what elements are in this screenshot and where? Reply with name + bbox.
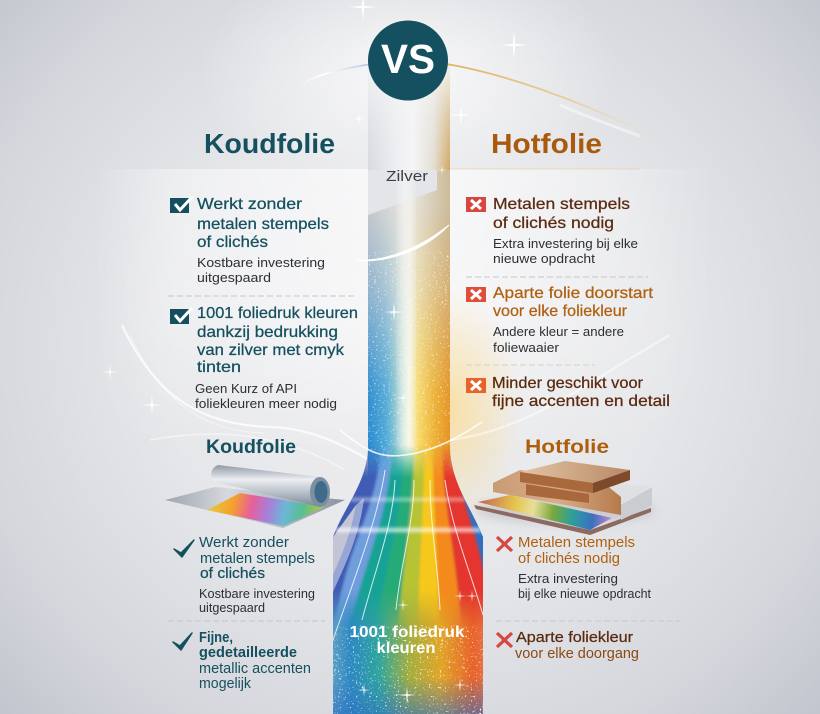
koudfolie item 2	[170, 305, 358, 411]
lower item 1 description: uitgespaard	[199, 601, 265, 615]
hot lower item 1 description	[518, 572, 652, 601]
hot item 3 heading	[492, 375, 670, 410]
hot item 3 heading: Minder geschikt voor	[492, 375, 644, 392]
lower item 2 text	[199, 629, 311, 692]
hotfolie item 1	[466, 196, 638, 266]
icon: check	[173, 633, 192, 650]
hotfolie item 2	[466, 285, 654, 355]
vs badge: VS	[381, 36, 435, 82]
top glow with glitter	[252, 0, 564, 137]
hot item 1 heading: Metalen stempels	[493, 196, 630, 213]
heading: hotfolie: Hotfolie	[491, 128, 602, 159]
hot lower item 2 text: Aparte foliekleur	[516, 629, 633, 646]
icon: cross box	[466, 287, 486, 302]
illustration: foil roll	[165, 465, 345, 528]
hot item 2 heading: Aparte folie doorstart	[493, 285, 654, 302]
icon: cross box	[466, 197, 486, 212]
hot lower item 1 text	[518, 534, 635, 567]
lower item 1 text	[199, 534, 315, 582]
hot item 2 heading	[493, 285, 654, 320]
hot item 1 heading: of clichés nodig	[493, 215, 614, 232]
hot item 1 heading	[493, 196, 630, 232]
item 2 description	[195, 381, 337, 411]
lower item 1 text: of clichés	[200, 565, 265, 582]
label: zilver: Zilver	[386, 168, 428, 185]
hot item 2 description: foliewaaier	[493, 340, 560, 355]
vs badge	[368, 20, 448, 100]
hot item 2 heading: voor elke foliekleur	[493, 303, 628, 320]
lower item 1 description: Kostbare investering	[199, 587, 315, 601]
hot lower item 1 text: of clichés nodig	[518, 550, 620, 567]
icon: check	[174, 540, 194, 557]
hotfolie lower item 1	[497, 534, 652, 601]
lower item 2 text: gedetailleerde	[199, 644, 297, 661]
hot lower item 2 text	[515, 629, 639, 662]
item 2 heading: van zilver met cmyk	[197, 342, 345, 359]
item 2 heading: 1001 foliedruk kleuren	[197, 305, 358, 322]
hotfolie lower item 2	[497, 629, 639, 662]
koudfolie item 1	[170, 196, 329, 285]
icon: checkbox	[170, 308, 192, 324]
item 1 heading: metalen stempels	[197, 216, 329, 233]
central colour band	[333, 66, 483, 714]
hot item 1 description: nieuwe opdracht	[493, 251, 595, 266]
lower item 1 description	[199, 587, 315, 615]
hot lower item 1 description: bij elke nieuwe opdracht	[518, 587, 652, 601]
hot item 2 description	[493, 324, 624, 355]
lower item 2 text: metallic accenten	[199, 660, 311, 677]
item 2 description: foliekleuren meer nodig	[195, 396, 337, 411]
hot lower item 1 description: Extra investering	[518, 572, 618, 586]
lower item 1 text: Werkt zonder	[199, 534, 289, 551]
hot item 1 description: Extra investering bij elke	[493, 236, 638, 251]
item 1 heading: Werkt zonder	[197, 196, 303, 213]
lower item 2 text: Fijne,	[199, 629, 233, 646]
band label	[350, 624, 465, 657]
hot item 3 heading: fijne accenten en detail	[492, 393, 670, 410]
sparkles	[102, 0, 528, 415]
subheading: koudfolie: Koudfolie	[206, 437, 296, 458]
koudfolie lower item 1	[174, 534, 315, 615]
subheading: hotfolie: Hotfolie	[525, 437, 609, 458]
item 2 heading: dankzij bedrukking	[197, 324, 338, 341]
band label: 1001 foliedruk	[350, 624, 465, 641]
item 1 heading	[197, 196, 329, 251]
icon: cross box	[466, 378, 486, 393]
item 2 description: Geen Kurz of API	[195, 381, 297, 396]
item 2 heading: tinten	[197, 359, 241, 376]
icon: cross	[497, 633, 512, 647]
icon: checkbox	[170, 197, 192, 213]
panel: hotfolie backdrop	[450, 168, 640, 510]
lower item 2 text: mogelijk	[199, 675, 251, 692]
hot item 2 description: Andere kleur = andere	[493, 324, 624, 339]
item 1 description	[197, 255, 325, 285]
heading: koudfolie: Koudfolie	[204, 128, 335, 159]
item 2 heading	[197, 305, 358, 376]
icon: cross	[497, 537, 512, 551]
illustration: stack of plates	[474, 461, 655, 535]
item 1 description: Kostbare investering	[197, 255, 325, 270]
item 1 description: uitgespaard	[197, 270, 271, 285]
panel: koudfolie backdrop	[149, 169, 368, 322]
hotfolie item 3	[466, 375, 670, 410]
koudfolie lower item 2	[173, 629, 311, 692]
item 1 heading: of clichés	[197, 234, 268, 251]
band label: kleuren	[376, 640, 436, 657]
decorative swoosh lines	[122, 63, 670, 470]
hot lower item 1 text: Metalen stempels	[518, 534, 635, 551]
lower item 1 text: metalen stempels	[200, 550, 315, 567]
hot item 1 description	[493, 236, 638, 266]
hot lower item 2 text: voor elke doorgang	[515, 645, 639, 662]
